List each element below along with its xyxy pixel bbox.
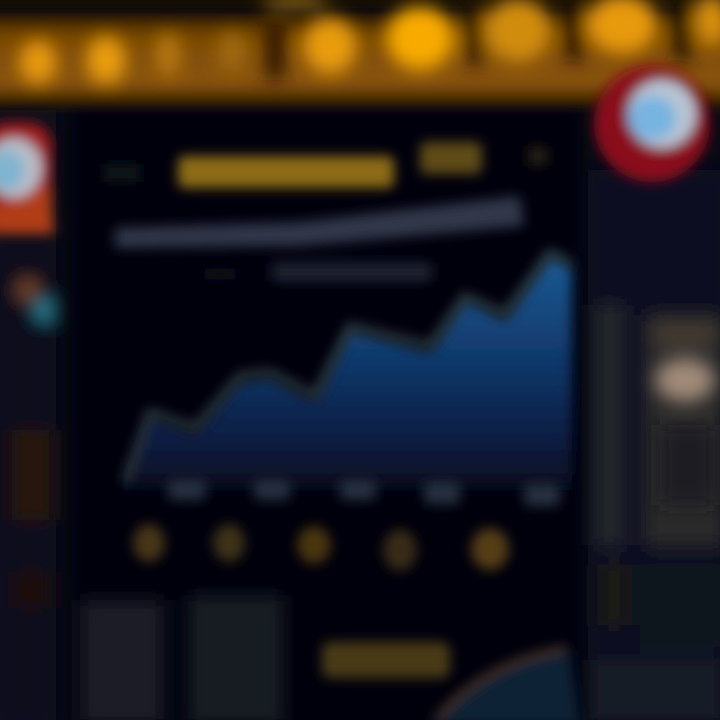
subtitle text	[115, 196, 524, 282]
bottom amber label	[322, 642, 450, 678]
side panel: left	[0, 110, 57, 720]
bottom arc	[430, 648, 580, 720]
bottom text columns	[80, 595, 284, 720]
side panel: right	[588, 170, 720, 720]
poster detail: right panel highlight	[655, 325, 715, 505]
amber data markers	[133, 524, 509, 571]
central panel	[72, 105, 580, 720]
top marquee band	[0, 0, 720, 106]
area chart	[120, 252, 572, 490]
icon: left red badge	[0, 122, 54, 234]
heading	[104, 142, 548, 188]
icon: right red badge	[594, 66, 710, 182]
chart axis labels	[168, 480, 560, 506]
marquee lights	[19, 0, 720, 84]
